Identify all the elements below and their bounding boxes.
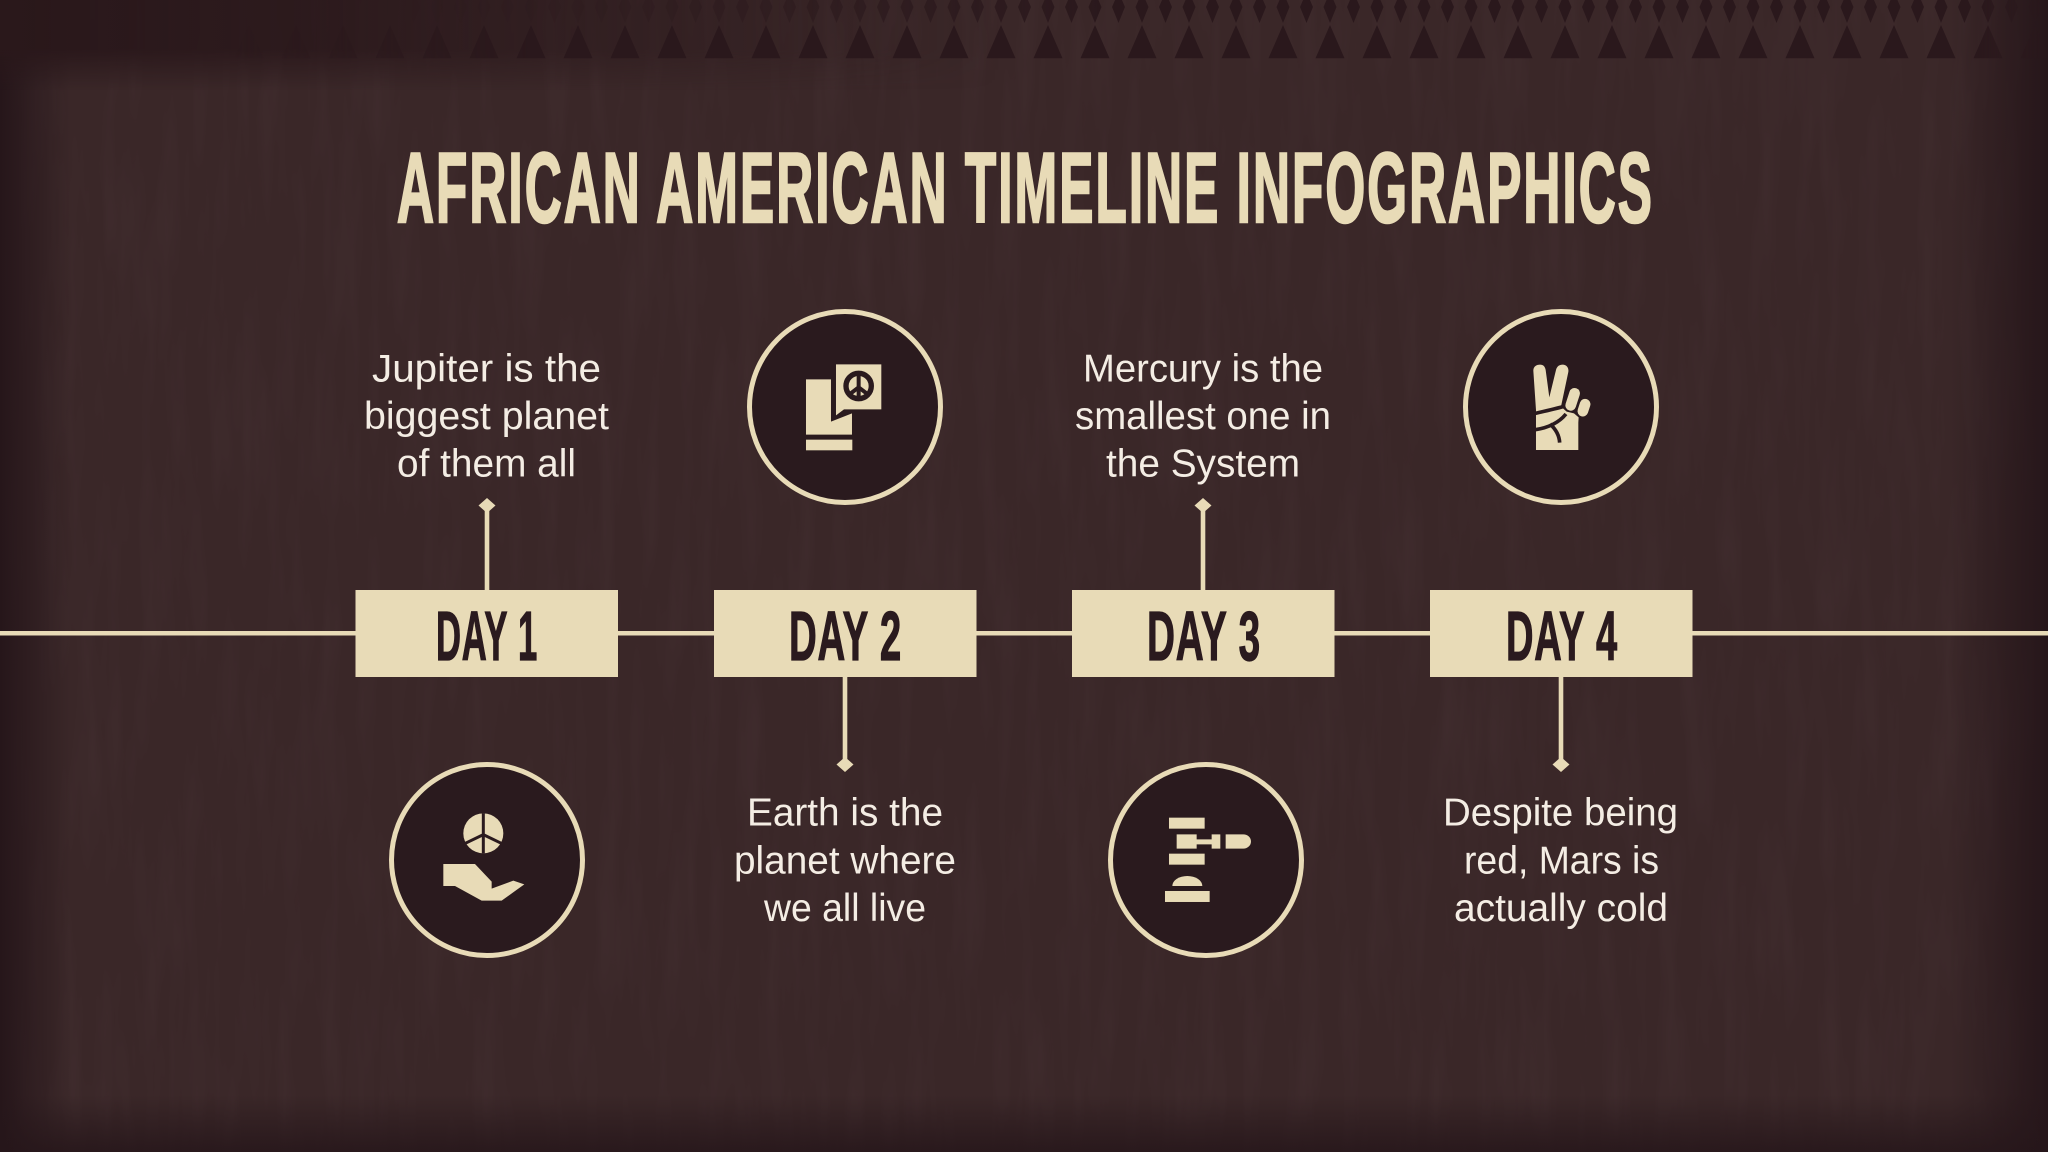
day 1 label box <box>356 590 618 677</box>
day 1 connector with diamond <box>478 498 496 590</box>
day 2 description: we all live <box>763 887 926 930</box>
day 1 description: Jupiter is the <box>372 348 601 390</box>
day 4 label box <box>1430 590 1692 677</box>
timeline item: day 1: DAY 1 <box>436 597 538 675</box>
day 3 description <box>1075 348 1331 486</box>
day 3 description: Mercury is the <box>1083 348 1323 390</box>
day 3 connector with diamond <box>1194 498 1212 590</box>
day 2 description: Earth is the <box>747 792 943 834</box>
day 1 description: biggest planet <box>364 395 609 438</box>
top tribal pattern band <box>484 0 1991 58</box>
day 2 description: planet where <box>734 840 956 882</box>
day 3 label box <box>1072 590 1334 677</box>
day 1 description: of them all <box>397 442 576 486</box>
timeline item: day 2 <box>714 312 976 930</box>
timeline horizontal line <box>0 631 2048 636</box>
day 2 description <box>734 792 956 930</box>
day 2 label box <box>714 590 976 677</box>
day 4 description: Despite being <box>1443 792 1678 834</box>
timeline item: day 3 <box>1072 348 1334 956</box>
icon: peace sign hand <box>1466 312 1656 502</box>
day 4 connector with diamond <box>1552 677 1570 772</box>
icon: hand holding peace symbol <box>392 764 582 956</box>
day 4 description: red, Mars is <box>1464 840 1659 882</box>
day 1 description <box>364 348 609 486</box>
timeline item: day 1 <box>356 348 618 956</box>
day 4 label: DAY 4 <box>1506 597 1618 675</box>
day 4 description <box>1443 792 1678 930</box>
icon: book with peace speech bubble <box>750 312 940 502</box>
timeline item: day 4 <box>1430 312 1692 930</box>
day 3 description: the System <box>1106 442 1300 486</box>
day 4 description: actually cold <box>1454 887 1668 930</box>
day 2 connector with diamond <box>836 677 854 772</box>
day 3 label: DAY 3 <box>1147 597 1261 675</box>
day 3 description: smallest one in <box>1075 395 1331 438</box>
icon: gavel <box>1110 764 1302 956</box>
day 2 label: DAY 2 <box>789 597 902 675</box>
